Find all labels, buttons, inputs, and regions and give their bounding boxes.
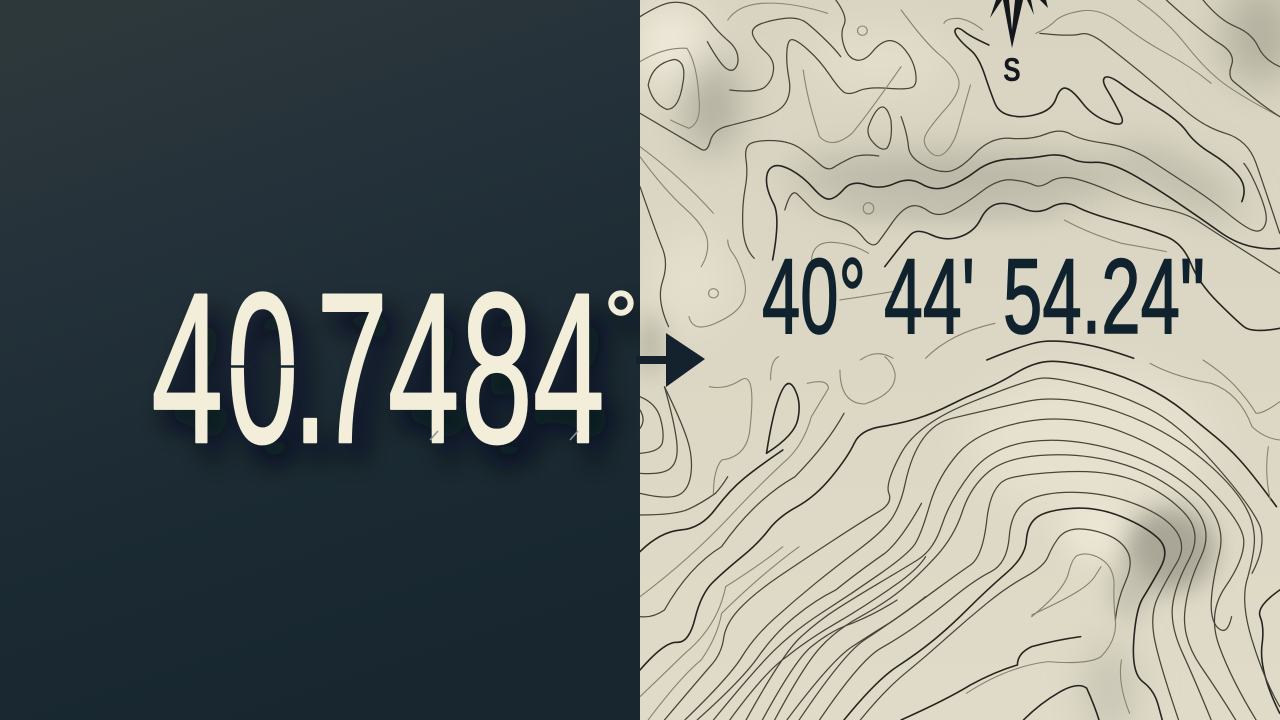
decimal degrees value: 40.7484 xyxy=(151,249,605,488)
decimal degrees value: ° xyxy=(604,275,638,370)
compass label: S xyxy=(1003,52,1021,89)
degrees minutes seconds value: 40° xyxy=(762,236,866,356)
terrain shading xyxy=(636,0,1280,720)
panel: topographic map side xyxy=(636,0,1280,720)
degrees minutes seconds value: 44' xyxy=(884,236,975,356)
contour lines, lower map xyxy=(640,357,1280,720)
panel: dark decimal-degrees side xyxy=(0,0,640,720)
icon: compass rose with S marker xyxy=(990,0,1048,89)
arrow from decimal value to map coordinates xyxy=(636,333,705,387)
degrees minutes seconds value xyxy=(763,257,1202,335)
contour lines, upper map xyxy=(640,0,1280,360)
